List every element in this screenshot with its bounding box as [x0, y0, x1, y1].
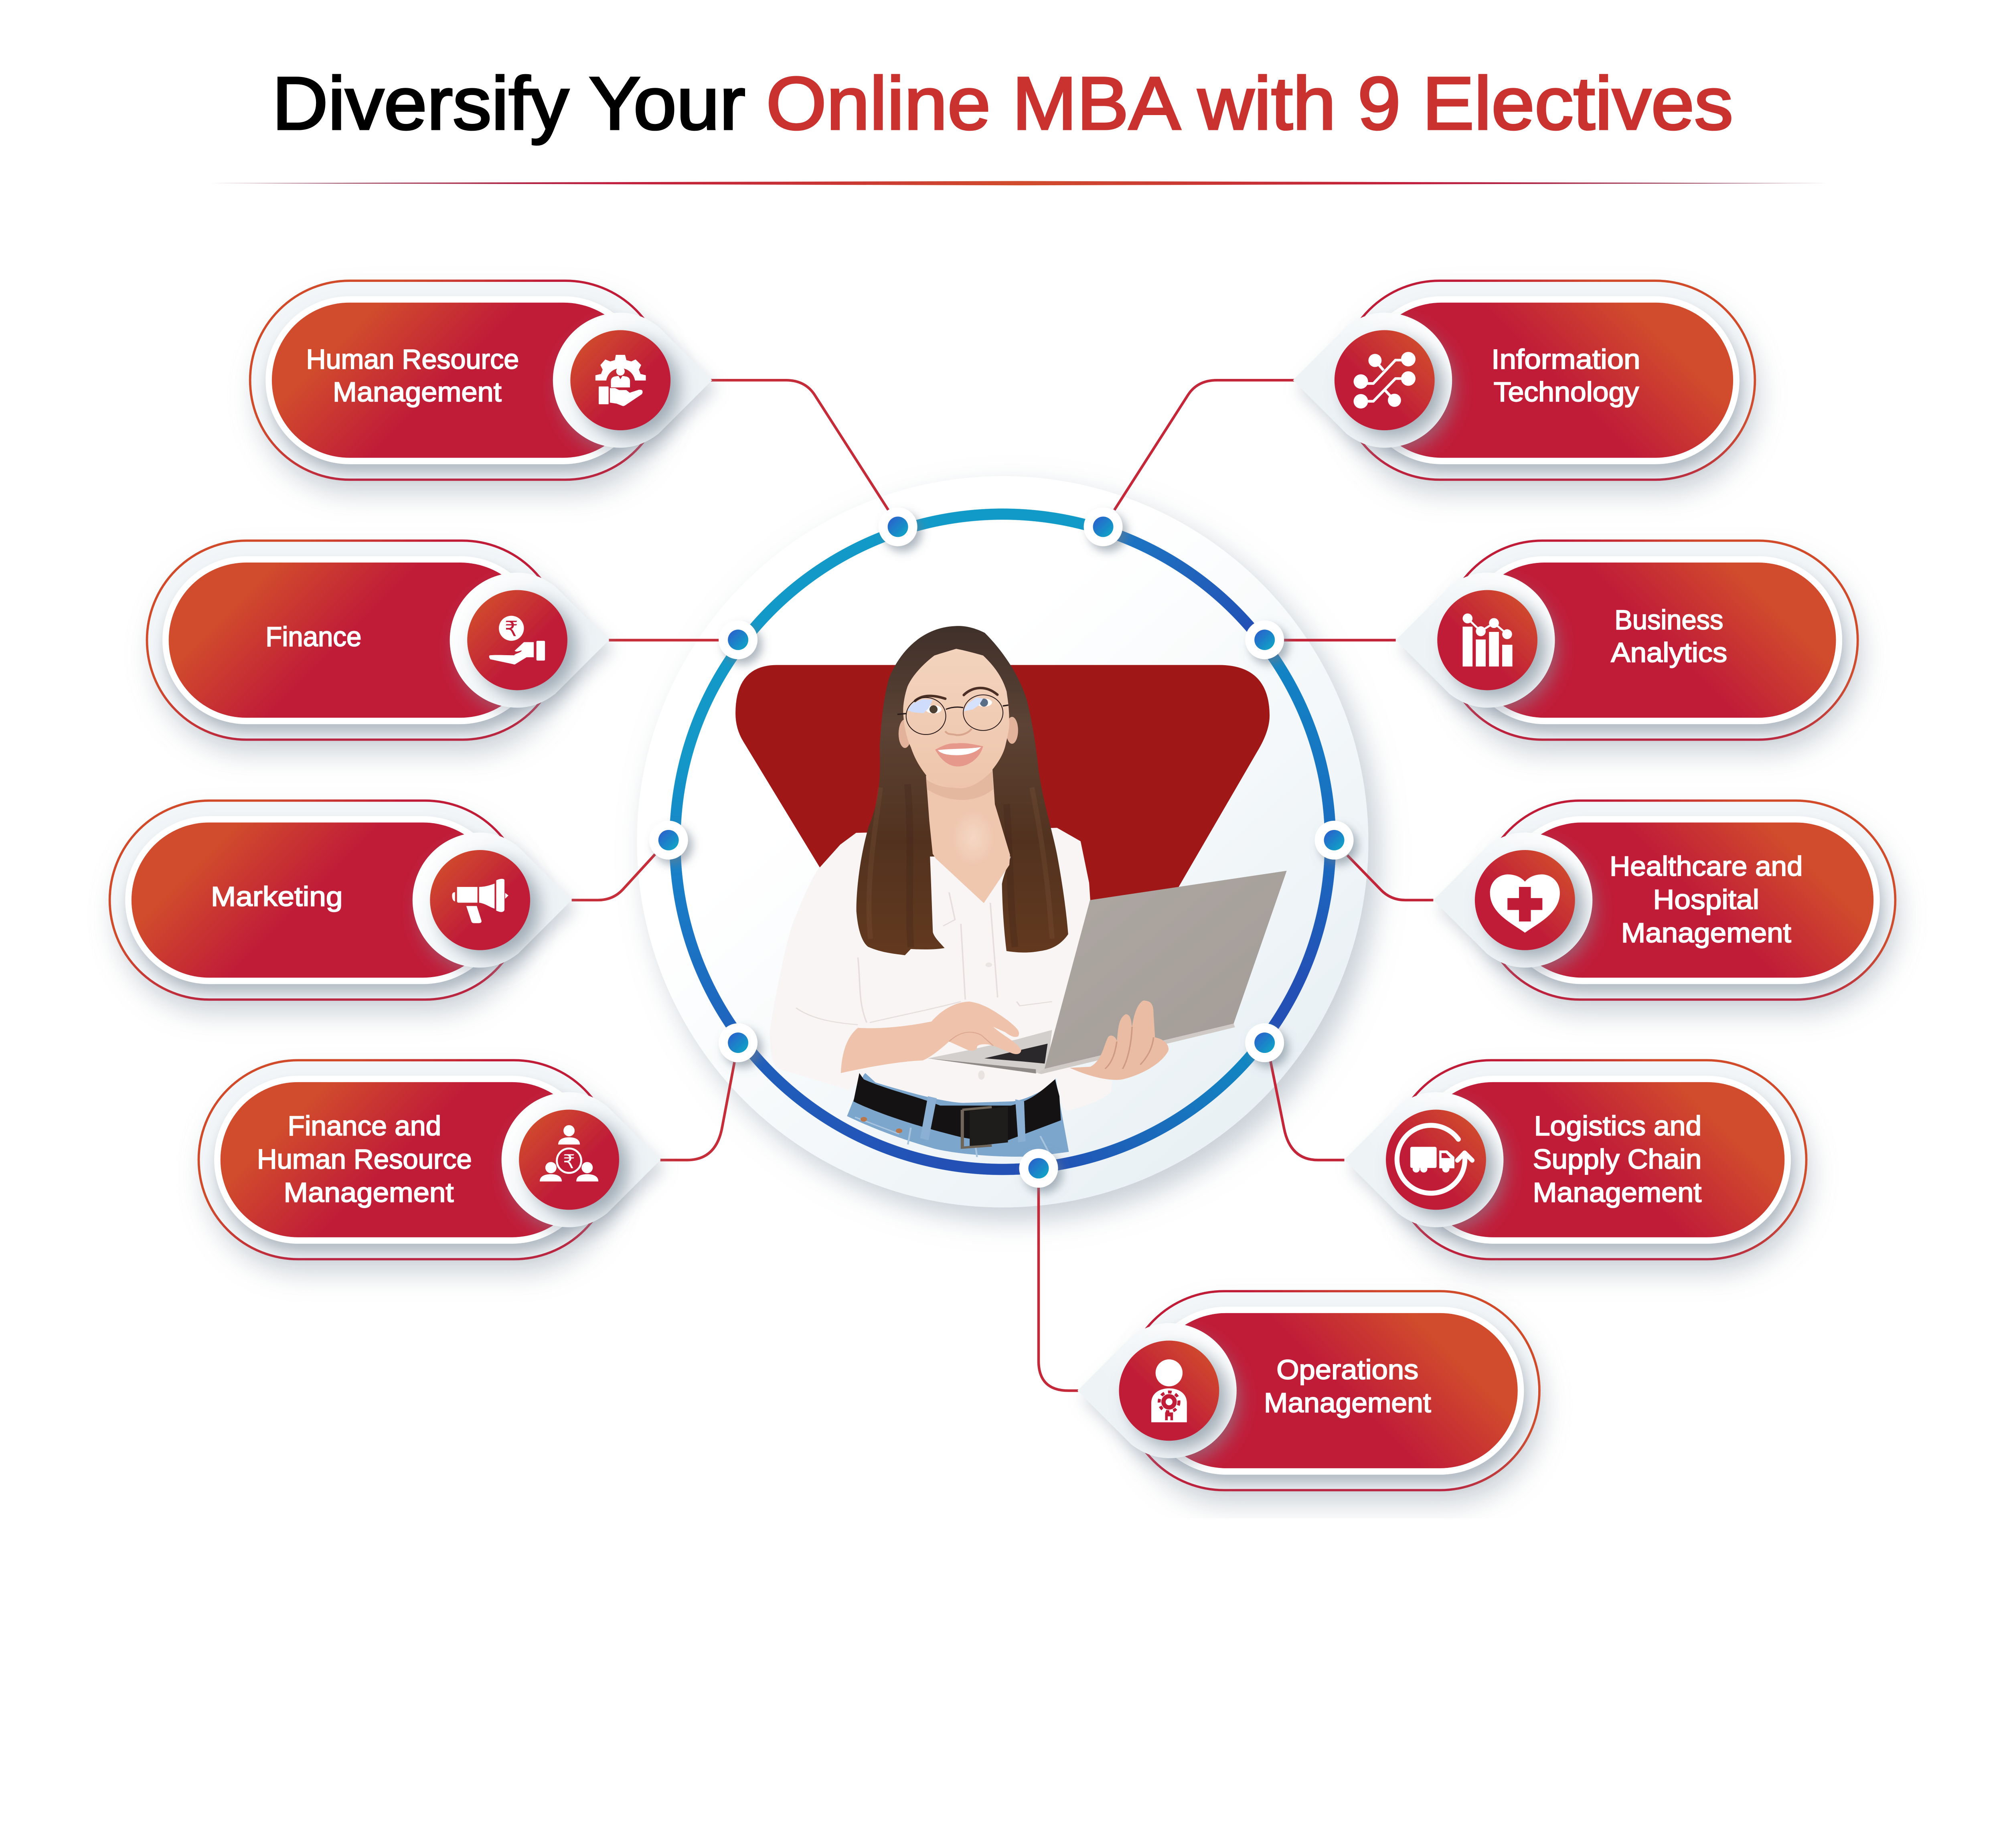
blue ring: [669, 508, 1336, 1175]
panel: Healthcare and Hospital Management: [1433, 801, 1895, 1000]
illustration: student with laptop: [735, 626, 1287, 1157]
face: [903, 649, 1009, 788]
panel: Logistics and Supply Chain Management: Supply Chain: [1533, 1144, 1701, 1175]
panel: Finance and Human Resource Management: Management: [284, 1177, 454, 1208]
panel: Business Analytics: Analytics: [1611, 637, 1727, 668]
icon: heart with cross: [1490, 874, 1560, 933]
panel: Marketing: [110, 801, 572, 1000]
icon: truck in circular arrow: [1397, 1125, 1472, 1193]
panel: Marketing: Marketing: [211, 881, 343, 912]
panel: Operations Management: Management: [1264, 1387, 1431, 1418]
icon: bar chart with trend line: [1462, 613, 1513, 666]
panel: Finance and Human Resource Management: Human Resource: [257, 1144, 472, 1175]
hair, neck and face: [857, 626, 1068, 955]
panel: Operations Management: Operations: [1276, 1354, 1418, 1385]
panel: Healthcare and Hospital Management: Hospital: [1653, 884, 1759, 915]
central disc: [637, 476, 1368, 1207]
icon: HR gear and hand: [595, 355, 646, 406]
glasses: [897, 695, 1009, 735]
icon: circuit network: [1354, 352, 1416, 409]
title: [272, 61, 1733, 145]
panel: Finance: Finance: [265, 621, 361, 652]
title: Diversify Your: [272, 61, 745, 145]
laptop base: [928, 1030, 1052, 1073]
panel: Logistics and Supply Chain Management: [1345, 1060, 1807, 1259]
panel: Human Resource Management: [250, 281, 712, 480]
panel: Business Analytics: [1396, 540, 1858, 740]
title: Online MBA with 9 Electives: [766, 61, 1733, 145]
panel: Operations Management: [1077, 1291, 1539, 1490]
eyes and glare: [926, 705, 942, 713]
panel: Information Technology: Information: [1491, 344, 1640, 374]
panel: Human Resource Management: Human Resource: [306, 344, 519, 374]
laptop lid: [1045, 871, 1287, 1069]
icon: person with gear: [1151, 1359, 1187, 1422]
holding hand: [1070, 1000, 1169, 1080]
panel: Finance: [147, 540, 609, 740]
connector lines: [572, 380, 1433, 1391]
nose: [945, 729, 972, 735]
icon: three people and rupee: [540, 1125, 598, 1182]
belt: [853, 1073, 1061, 1141]
neck and chest: [926, 767, 1010, 903]
red rounded triangle: [735, 665, 1270, 1014]
panel: Finance and Human Resource Management: Finance and: [288, 1111, 441, 1142]
panel: Business Analytics: Business: [1614, 604, 1723, 635]
panel: Human Resource Management: Management: [333, 376, 502, 407]
icon: rupee on hand: ₹: [505, 617, 518, 642]
ears: [899, 719, 911, 748]
panel: Logistics and Supply Chain Management: Management: [1533, 1177, 1701, 1208]
panel: Logistics and Supply Chain Management: Logistics and: [1534, 1111, 1701, 1142]
panel: Information Technology: [1293, 281, 1755, 480]
icon: three people and rupee: ₹: [563, 1151, 575, 1173]
ring node dots: [649, 507, 1354, 1188]
panel: Healthcare and Hospital Management: Management: [1621, 917, 1791, 948]
eyebrows: [915, 696, 945, 701]
panel: Finance and Human Resource Management: [198, 1060, 660, 1259]
body: shirt, jeans, belt, typing hand: [770, 828, 1112, 1157]
icon: rupee on hand: [489, 616, 545, 664]
mouth: [935, 743, 983, 767]
typing arm: [841, 1002, 1021, 1073]
panel: Information Technology: Technology: [1494, 376, 1639, 407]
panel: Healthcare and Hospital Management: Healthcare and: [1610, 851, 1802, 882]
icon: megaphone: [452, 879, 508, 923]
